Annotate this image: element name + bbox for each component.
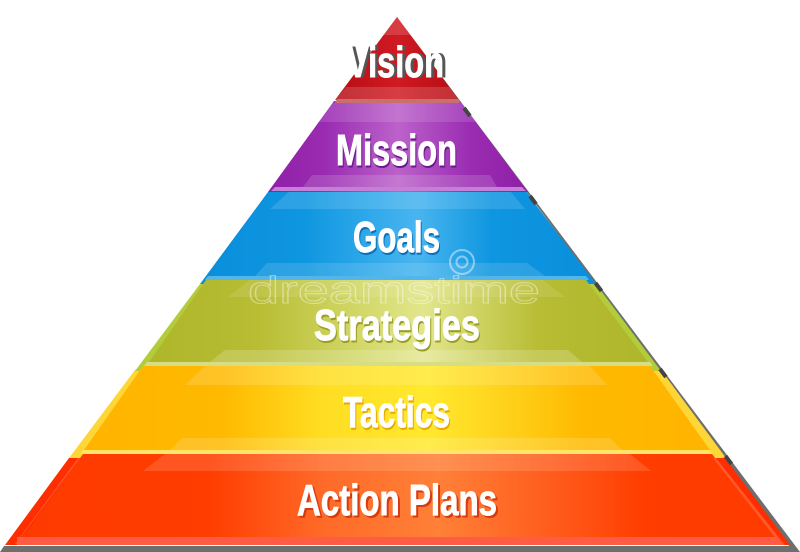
band: Vision <box>335 17 460 103</box>
band: Action Plans <box>15 454 785 545</box>
edge joints <box>464 108 732 464</box>
band: Goals <box>205 191 589 280</box>
label: Vision: Vision <box>347 38 444 87</box>
label: Action Plans: Action Plans <box>297 476 497 525</box>
watermark: dreamstime <box>248 270 540 312</box>
watermark <box>248 250 540 312</box>
label: Goals: Goals <box>353 213 440 262</box>
label: Mission: Mission <box>336 126 457 175</box>
band: Mission <box>268 101 528 192</box>
band: Tactics <box>81 366 712 454</box>
label: Tactics: Tactics <box>343 388 450 437</box>
label: Strategies: Strategies <box>314 301 480 350</box>
side strips <box>5 192 790 545</box>
band: Strategies <box>144 280 653 366</box>
